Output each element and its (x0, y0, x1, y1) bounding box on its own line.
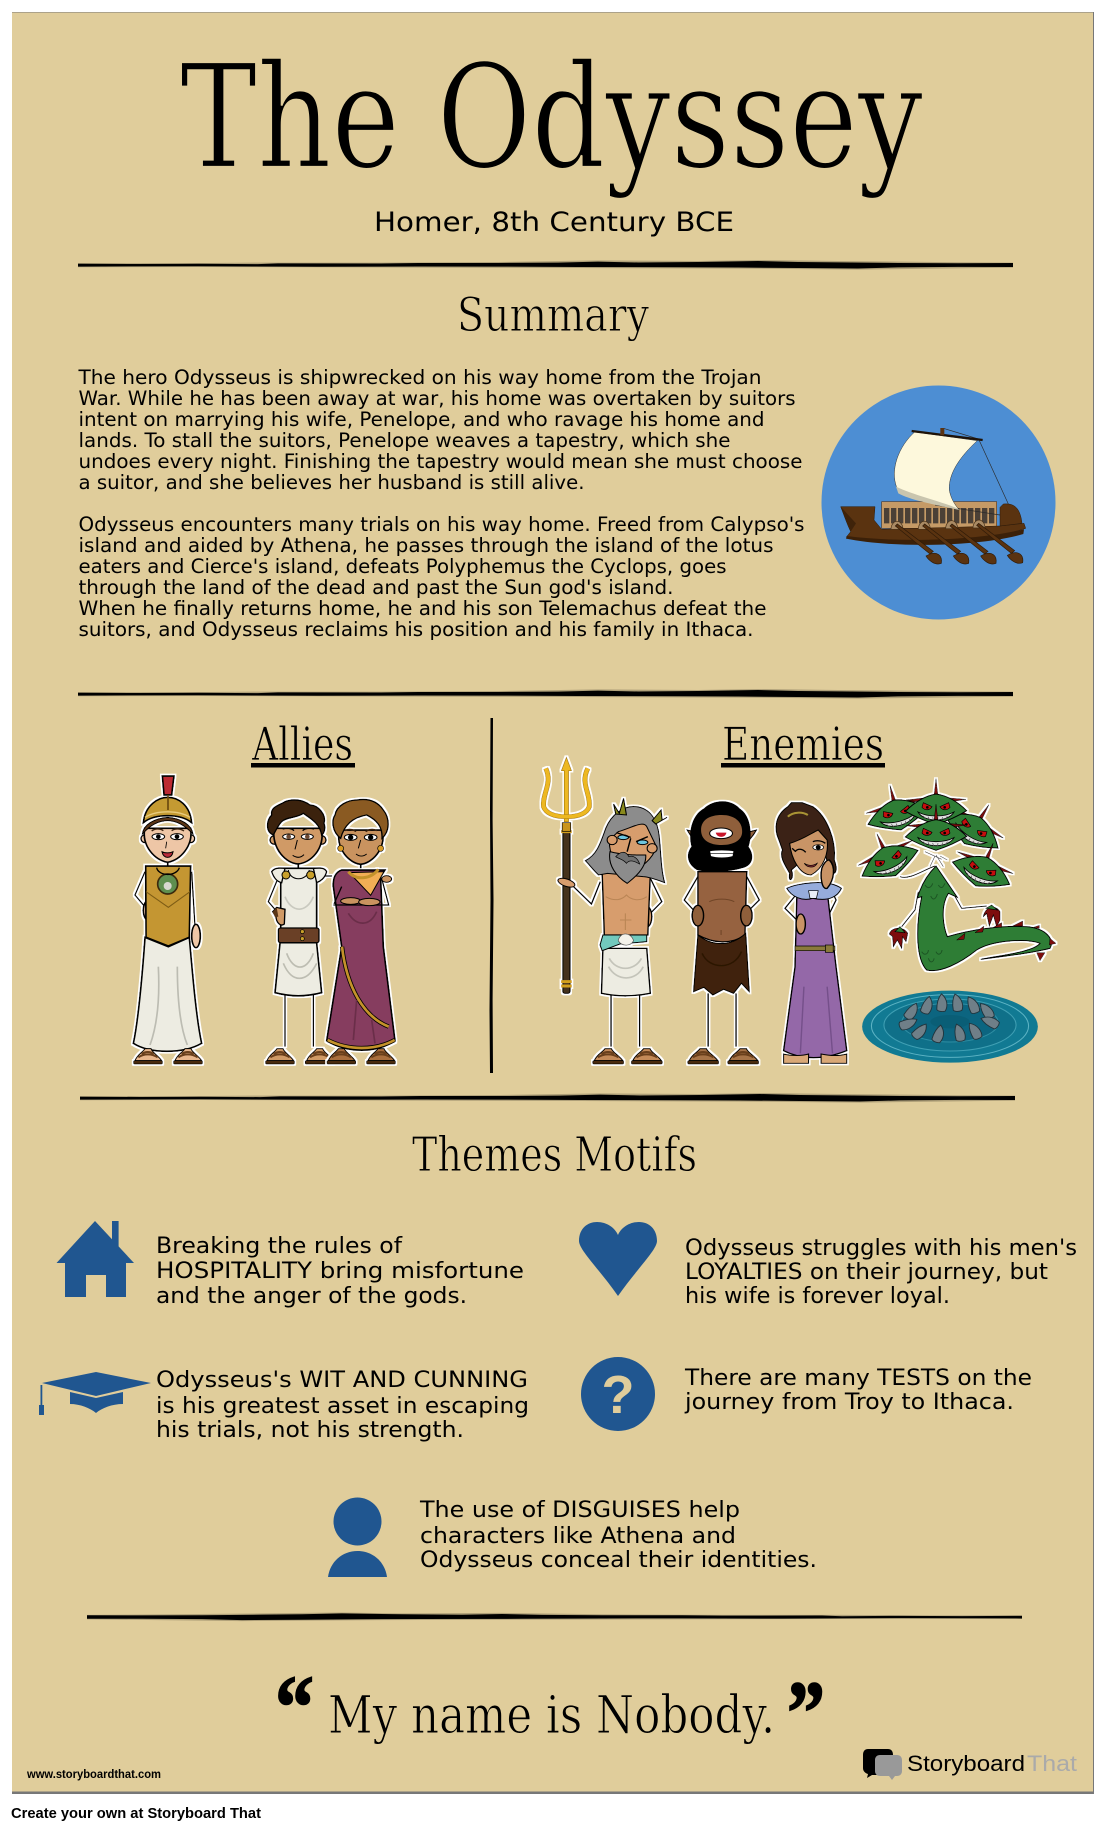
icon: question mark circle: ? (602, 1365, 634, 1425)
heading: summary: Summary (457, 288, 649, 343)
theme: tests (581, 1357, 1032, 1431)
text block: summary first paragraph: lands. To stall the suitors, Penelope weaves a tapestry, which she (78, 429, 730, 452)
vertical divider (490, 718, 494, 1073)
character: Penelope (327, 799, 395, 1064)
icon: question mark circle (581, 1357, 655, 1431)
theme: wit and cunning: is his greatest asset in escaping (156, 1393, 529, 1419)
icon: ship in blue circle (822, 386, 1056, 620)
icon: house (56, 1221, 134, 1297)
text block: summary second paragraph: eaters and Cierce's island, defeats Polyphemus the Cyclops, goes (78, 555, 726, 578)
text block: summary first paragraph: The hero Odysseus is shipwrecked on his way home from the Trojan (77, 366, 761, 389)
logo: Storyboard That (863, 1749, 1077, 1780)
character: Circe in purple (776, 803, 847, 1063)
theme: hospitality: and the anger of the gods. (156, 1283, 467, 1309)
theme: disguises: characters like Athena and (420, 1523, 736, 1549)
theme: loyalty: his wife is forever loyal. (685, 1283, 950, 1309)
footer credit: Create your own at Storyboard That (11, 1806, 261, 1822)
theme: wit and cunning (39, 1367, 529, 1443)
character: Scylla monster (849, 778, 1056, 971)
text block: summary second paragraph: suitors, and Odysseus reclaims his position and his family in Ithaca. (78, 618, 754, 641)
theme: hospitality: Breaking the rules of (156, 1233, 403, 1259)
theme: hospitality: HOSPITALITY bring misfortune (156, 1258, 524, 1284)
theme: tests: There are many TESTS on the (684, 1365, 1032, 1391)
heading: allies: Allies (251, 717, 353, 771)
text block: summary first paragraph: War. While he has been away at war, his home was overtaken by suitors (78, 387, 796, 410)
quote: My name is Nobody. (328, 1686, 775, 1746)
theme: disguises: Odysseus conceal their identities. (420, 1547, 817, 1573)
quote: “ (275, 1658, 314, 1757)
theme: wit and cunning: his trials, not his strength. (156, 1417, 464, 1443)
theme: loyalty (579, 1222, 1077, 1309)
text block: summary second paragraph: through the land of the dead and past the Sun god's island. (78, 576, 674, 599)
text block: summary first paragraph: a suitor, and she believes her husband is still alive. (78, 471, 584, 494)
heading: enemies: Enemies (722, 717, 884, 771)
icon: heart (579, 1222, 657, 1296)
theme: tests: journey from Troy to Ithaca. (684, 1389, 1014, 1415)
subtitle: Homer, 8th Century BCE (374, 207, 734, 238)
text block: summary second paragraph: Odysseus encounters many trials on his way home. Freed from Calypso's (78, 513, 805, 536)
text block: summary first paragraph (77, 366, 803, 494)
text block: summary first paragraph: undoes every night. Finishing the tapestry would mean she must choose (78, 450, 803, 473)
theme: hospitality (56, 1221, 524, 1309)
logo: Storyboard That: That (1027, 1751, 1077, 1776)
theme: wit and cunning: Odysseus's WIT AND CUNNING (156, 1367, 528, 1393)
character: Polyphemus the Cyclops (684, 801, 759, 1064)
illustration: Charybdis whirlpool (862, 991, 1038, 1063)
footer url: www.storyboardthat.com (26, 1769, 161, 1781)
text block: summary second paragraph (78, 513, 805, 641)
quote (275, 1658, 825, 1763)
heading: themes motifs: Themes Motifs (412, 1127, 697, 1183)
icon: graduation cap (39, 1372, 151, 1415)
logo: Storyboard That: Storyboard (907, 1751, 1025, 1776)
character: Poseidon with trident (543, 757, 667, 1064)
icon: person silhouette (328, 1498, 387, 1577)
theme: loyalty: Odysseus struggles with his men's (685, 1235, 1077, 1261)
character: Athena (133, 776, 202, 1064)
character: Odysseus (266, 800, 338, 1064)
theme: loyalty: LOYALTIES on their journey, but (685, 1259, 1048, 1285)
quote: ” (787, 1664, 825, 1763)
title: The Odyssey (180, 33, 923, 201)
theme: disguises: The use of DISGUISES help (419, 1497, 740, 1523)
text block: summary second paragraph: When he finally returns home, he and his son Telemachus defeat the (78, 597, 766, 620)
text block: summary first paragraph: intent on marrying his wife, Penelope, and who ravage his home and (78, 408, 764, 431)
text block: summary second paragraph: island and aided by Athena, he passes through the island of the lotus (78, 534, 774, 557)
theme: disguises (328, 1497, 817, 1577)
